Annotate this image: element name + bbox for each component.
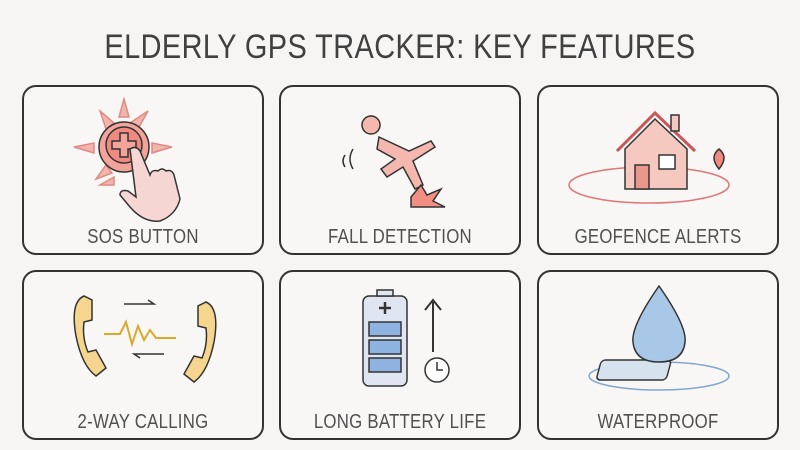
panel: 2-way calling: 2-WAY CALLING: [78, 411, 208, 433]
panel: 2-way calling: [22, 270, 264, 440]
icon: sos button hand: [74, 96, 181, 222]
title: ELDERLY GPS TRACKER: KEY FEATURES: [104, 28, 696, 66]
panel: sos button: [22, 85, 264, 255]
panel: sos button: SOS BUTTON: [87, 226, 199, 248]
panel: fall detection: FALL DETECTION: [328, 226, 472, 248]
panel: fall detection: [279, 85, 521, 255]
panel: waterproof: [537, 270, 779, 440]
icon: water drop on device: [588, 284, 730, 391]
panel: long battery life: LONG BATTERY LIFE: [314, 411, 486, 433]
icon: two phones with wave: [73, 295, 217, 383]
icon: battery with arrow and clock: [362, 289, 450, 387]
panel: geofence alerts: GEOFENCE ALERTS: [575, 226, 741, 248]
icon: house with geofence: [568, 111, 730, 204]
icon: falling person: [342, 115, 446, 208]
panel: waterproof: WATERPROOF: [597, 411, 719, 433]
panel: long battery life: [279, 270, 521, 440]
panel: geofence alerts: [537, 85, 779, 255]
